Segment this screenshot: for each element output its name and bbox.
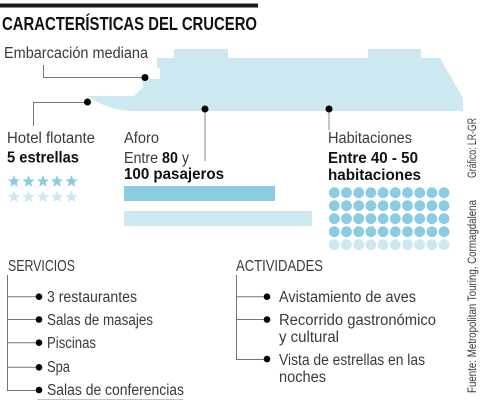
panel: actividades: noches xyxy=(279,369,326,386)
panel: actividades: Avistamiento de aves xyxy=(279,289,416,306)
callout: hotel flotante: Hotel flotante xyxy=(7,130,95,147)
ship silhouette xyxy=(88,49,463,111)
credit: fuente: Fuente: Metropolitan Touring, Cormagdalena xyxy=(467,199,479,393)
panel: servicios: 3 restaurantes xyxy=(47,289,137,306)
callout: hotel flotante xyxy=(7,98,95,166)
panel: servicios: Piscinas xyxy=(47,335,96,352)
panel: actividades: y cultural xyxy=(279,329,339,346)
callout: embarcación mediana: Embarcación mediana xyxy=(4,45,148,62)
callout: embarcación mediana xyxy=(4,45,148,81)
callout: aforo xyxy=(124,106,224,183)
icon: star rating xyxy=(8,175,78,202)
dot grid: habitaciones xyxy=(329,187,449,250)
panel: servicios: Salas de masajes xyxy=(47,312,153,329)
callout: aforo: 100 pasajeros xyxy=(124,166,224,183)
bar chart: pasajeros xyxy=(124,186,312,226)
panel: actividades: Vista de estrellas en las xyxy=(279,352,425,369)
panel: actividades xyxy=(236,258,436,386)
callout: habitaciones: habitaciones xyxy=(328,167,421,184)
callout: habitaciones xyxy=(326,106,421,184)
callout: habitaciones: Entre 40 - 50 xyxy=(328,150,418,167)
panel: servicios: Spa xyxy=(47,359,70,376)
callout: hotel flotante: 5 estrellas xyxy=(7,150,79,166)
panel: servicios xyxy=(8,258,184,400)
panel: servicios: Salas de conferencias xyxy=(47,382,184,399)
credit: gráfico: Gráfico: LR-GR xyxy=(467,118,479,178)
title: CARACTERÍSTICAS DEL CRUCERO xyxy=(2,13,257,34)
callout: habitaciones: Habitaciones xyxy=(328,130,412,147)
panel: servicios: SERVICIOS xyxy=(8,258,75,275)
panel: actividades: Recorrido gastronómico xyxy=(279,312,436,329)
callout: aforo: Entre 80 y xyxy=(124,150,189,167)
callout: aforo: Aforo xyxy=(124,130,159,147)
panel: actividades: ACTIVIDADES xyxy=(236,258,323,275)
